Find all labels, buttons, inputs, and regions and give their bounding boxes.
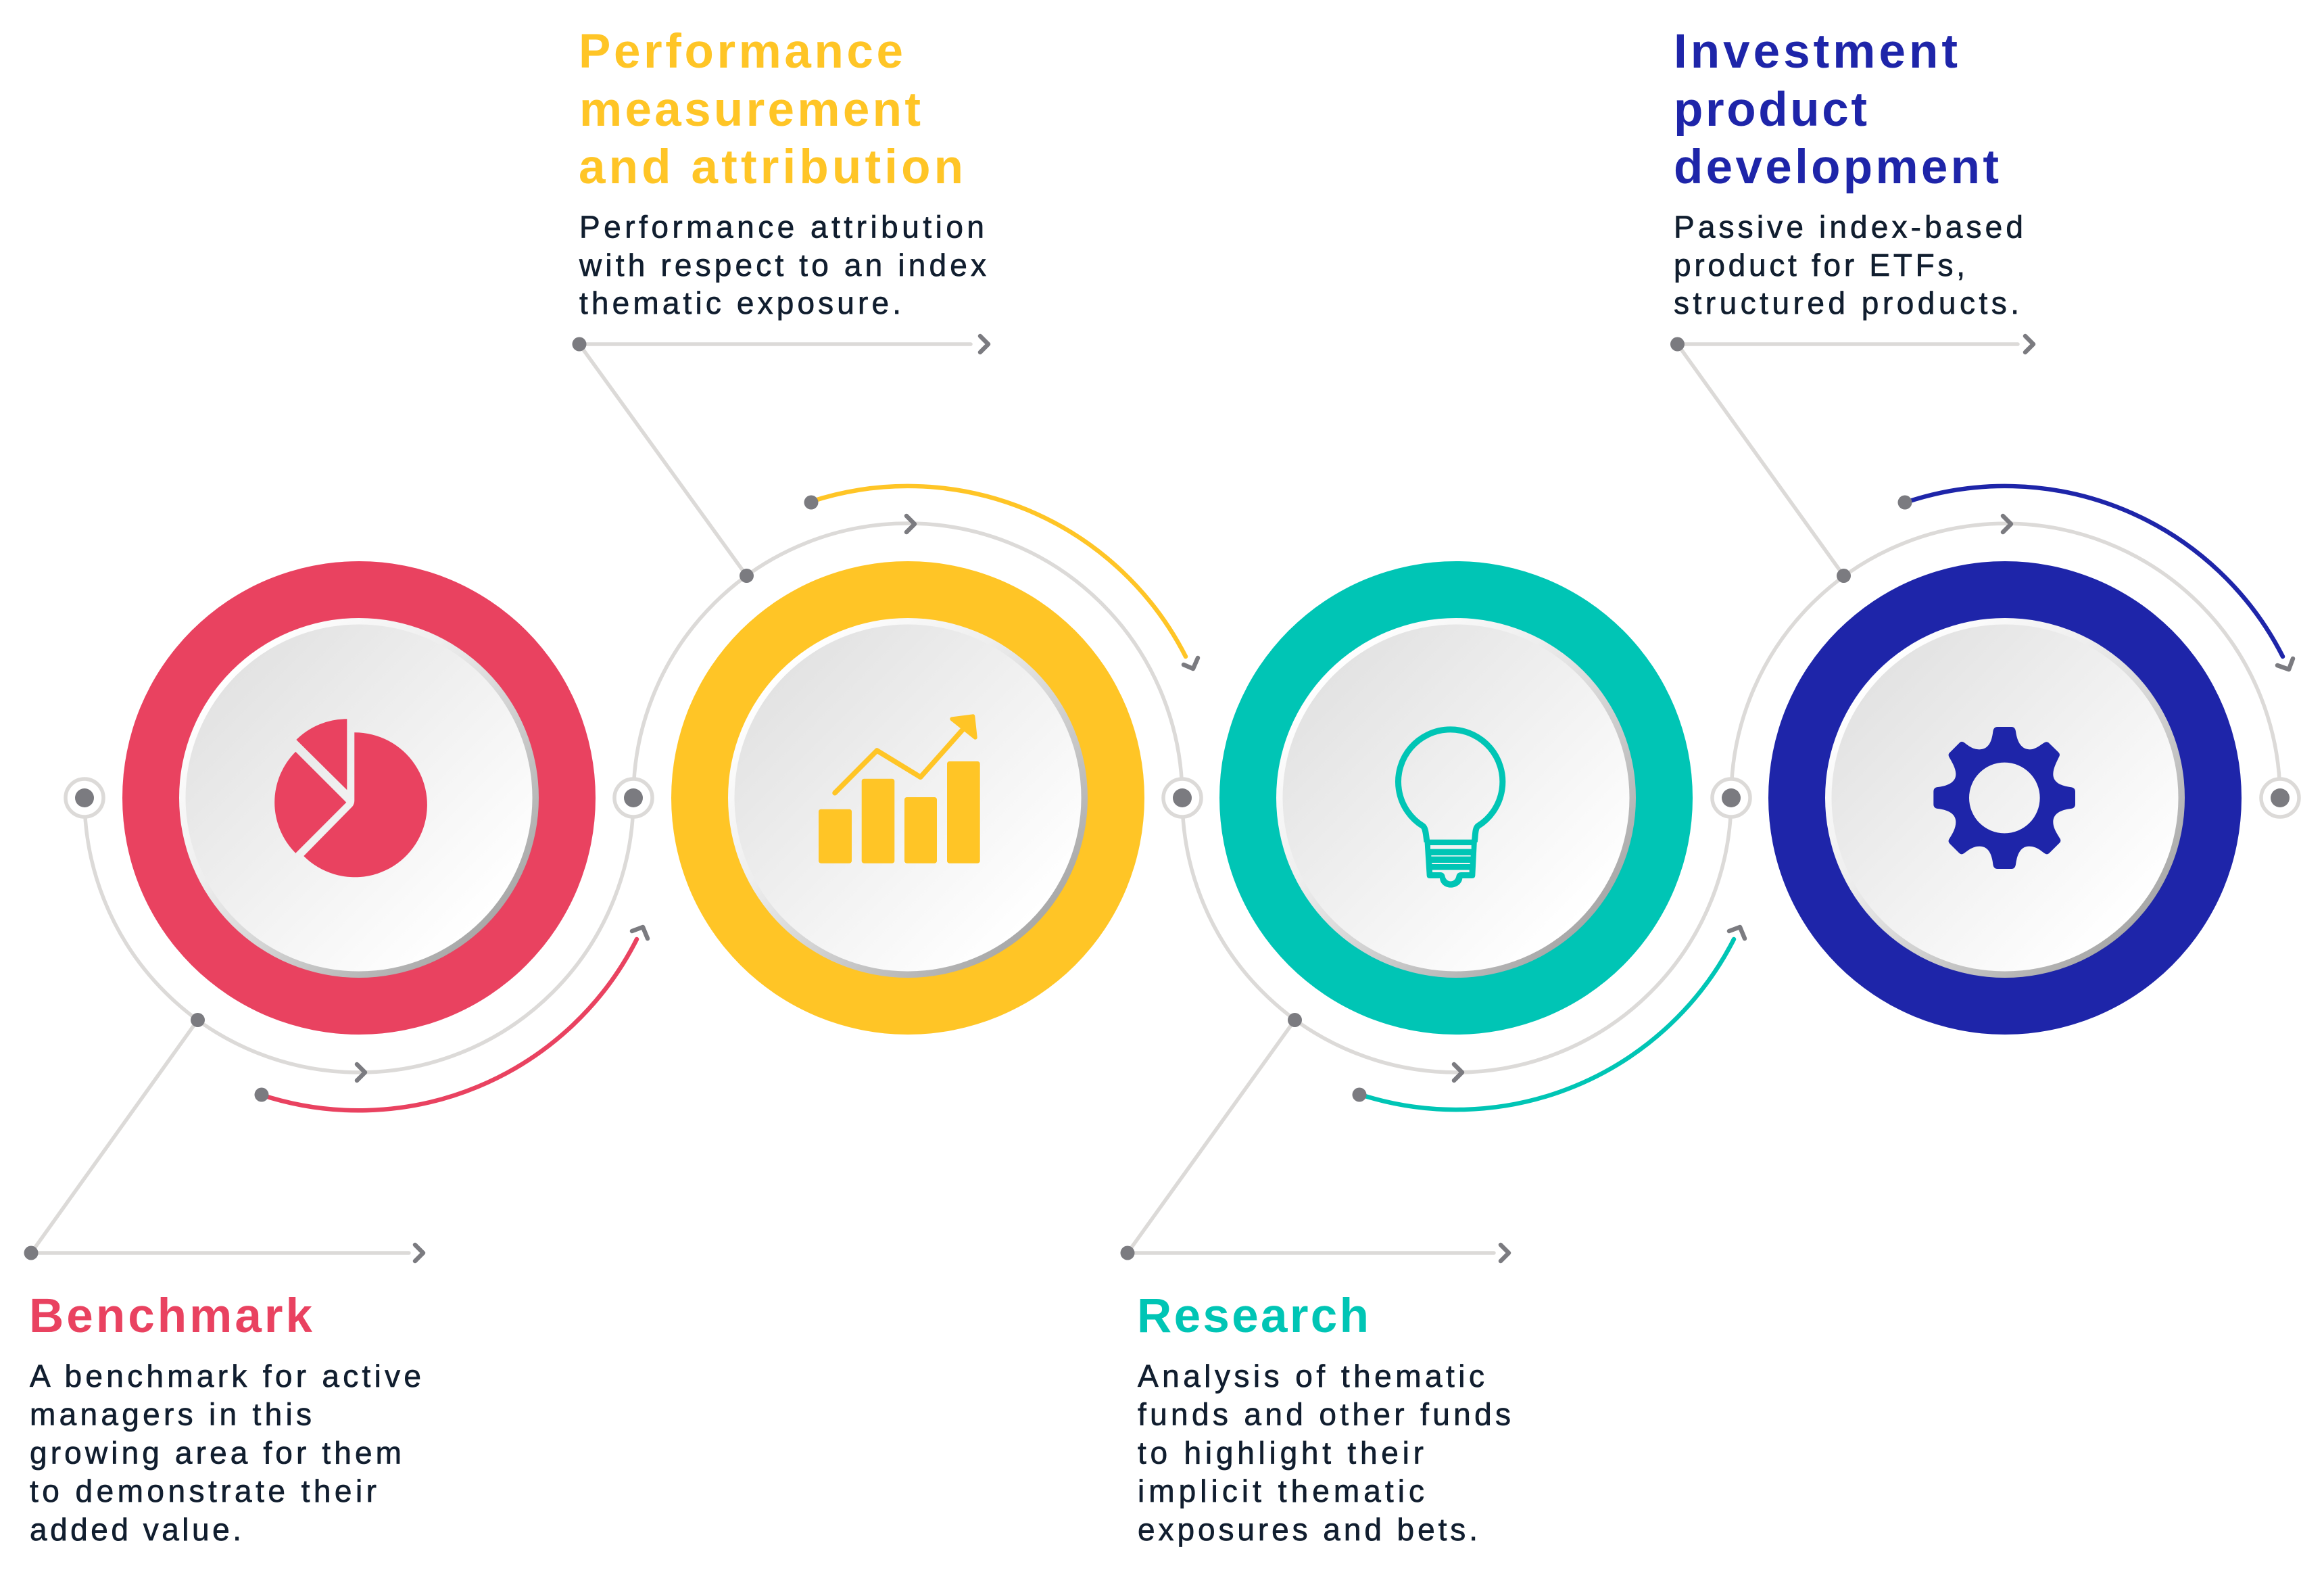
inner face	[734, 625, 1082, 971]
connector arc: step 2 top	[633, 523, 1182, 798]
arrow: Investment coloured arc	[1898, 486, 2293, 669]
coloured disc	[122, 561, 596, 1035]
panel: Research circle	[1219, 561, 1693, 1035]
description: Performance attribution	[579, 210, 984, 245]
description: product for ETFs,	[1674, 247, 1965, 283]
description: growing area for them	[30, 1435, 402, 1470]
icon: light bulb	[1398, 730, 1503, 888]
callout leader: Research	[1121, 1013, 1509, 1261]
description: Analysis of thematic	[1138, 1358, 1484, 1394]
heading: Research	[1137, 1289, 1369, 1343]
bevel rim	[1825, 618, 2185, 978]
description: structured products.	[1674, 285, 2019, 321]
bevel rim	[179, 618, 539, 978]
connector arc: step 4 top	[1731, 523, 2280, 798]
icon: rising bar chart	[819, 716, 980, 863]
arrow: step 1 connector chevron	[357, 1064, 365, 1081]
node markers on the connector	[66, 779, 2299, 817]
arrow: Research coloured arc	[1352, 927, 1745, 1110]
heading: measurement	[579, 83, 921, 137]
description: implicit thematic	[1138, 1473, 1424, 1509]
callout leader: Investment	[1670, 336, 2033, 583]
panel: Benchmark circle	[122, 561, 596, 1035]
bevel rim	[1276, 618, 1636, 978]
arrow: step 2 connector chevron	[906, 516, 915, 532]
description: added value.	[30, 1512, 241, 1547]
inner face	[1283, 625, 1629, 971]
description	[579, 210, 986, 321]
arrow: Performance coloured arc	[804, 486, 1198, 669]
callout leader: Performance	[572, 336, 988, 583]
heading: product	[1674, 83, 1867, 137]
text block: Research	[1137, 1289, 1511, 1547]
description: exposures and bets.	[1138, 1512, 1478, 1547]
connector arc: step 3 bottom	[1182, 798, 1731, 1072]
heading	[1674, 25, 1999, 194]
heading	[579, 25, 963, 194]
description	[30, 1358, 421, 1547]
heading: Performance	[579, 25, 903, 78]
icon: pie chart	[274, 719, 427, 877]
description: thematic exposure.	[579, 285, 901, 321]
description: Passive index-based	[1674, 210, 2023, 245]
panel: Investment circle	[1768, 561, 2242, 1035]
coloured disc	[1768, 561, 2242, 1035]
text block: Performance measurement and attribution	[579, 25, 986, 321]
description: with respect to an index	[579, 247, 986, 283]
description: managers in this	[30, 1397, 312, 1432]
description: A benchmark for active	[30, 1358, 421, 1394]
text block: Investment product development	[1674, 25, 2023, 321]
heading: development	[1674, 141, 1999, 194]
heading: and attribution	[579, 141, 963, 194]
coloured disc	[671, 561, 1144, 1035]
coloured disc	[1219, 561, 1693, 1035]
description	[1138, 1358, 1511, 1547]
description	[1674, 210, 2023, 321]
description: to highlight their	[1138, 1435, 1424, 1470]
heading: Benchmark	[29, 1289, 312, 1343]
callout leader: Benchmark	[24, 1013, 423, 1261]
heading: Investment	[1674, 25, 1958, 78]
description: to demonstrate their	[30, 1473, 377, 1509]
text block: Benchmark	[29, 1289, 421, 1547]
icon: gear	[1933, 727, 2075, 869]
inner face	[185, 625, 533, 971]
arrow: step 4 connector chevron	[2003, 516, 2011, 532]
inner face	[1832, 625, 2178, 971]
arrow: Benchmark coloured arc	[254, 927, 648, 1110]
panel: Performance circle	[671, 561, 1144, 1035]
description: funds and other funds	[1138, 1397, 1511, 1432]
arrow: step 3 connector chevron	[1454, 1064, 1462, 1081]
connector arc: step 1 bottom	[84, 798, 633, 1072]
bevel rim	[728, 618, 1088, 978]
